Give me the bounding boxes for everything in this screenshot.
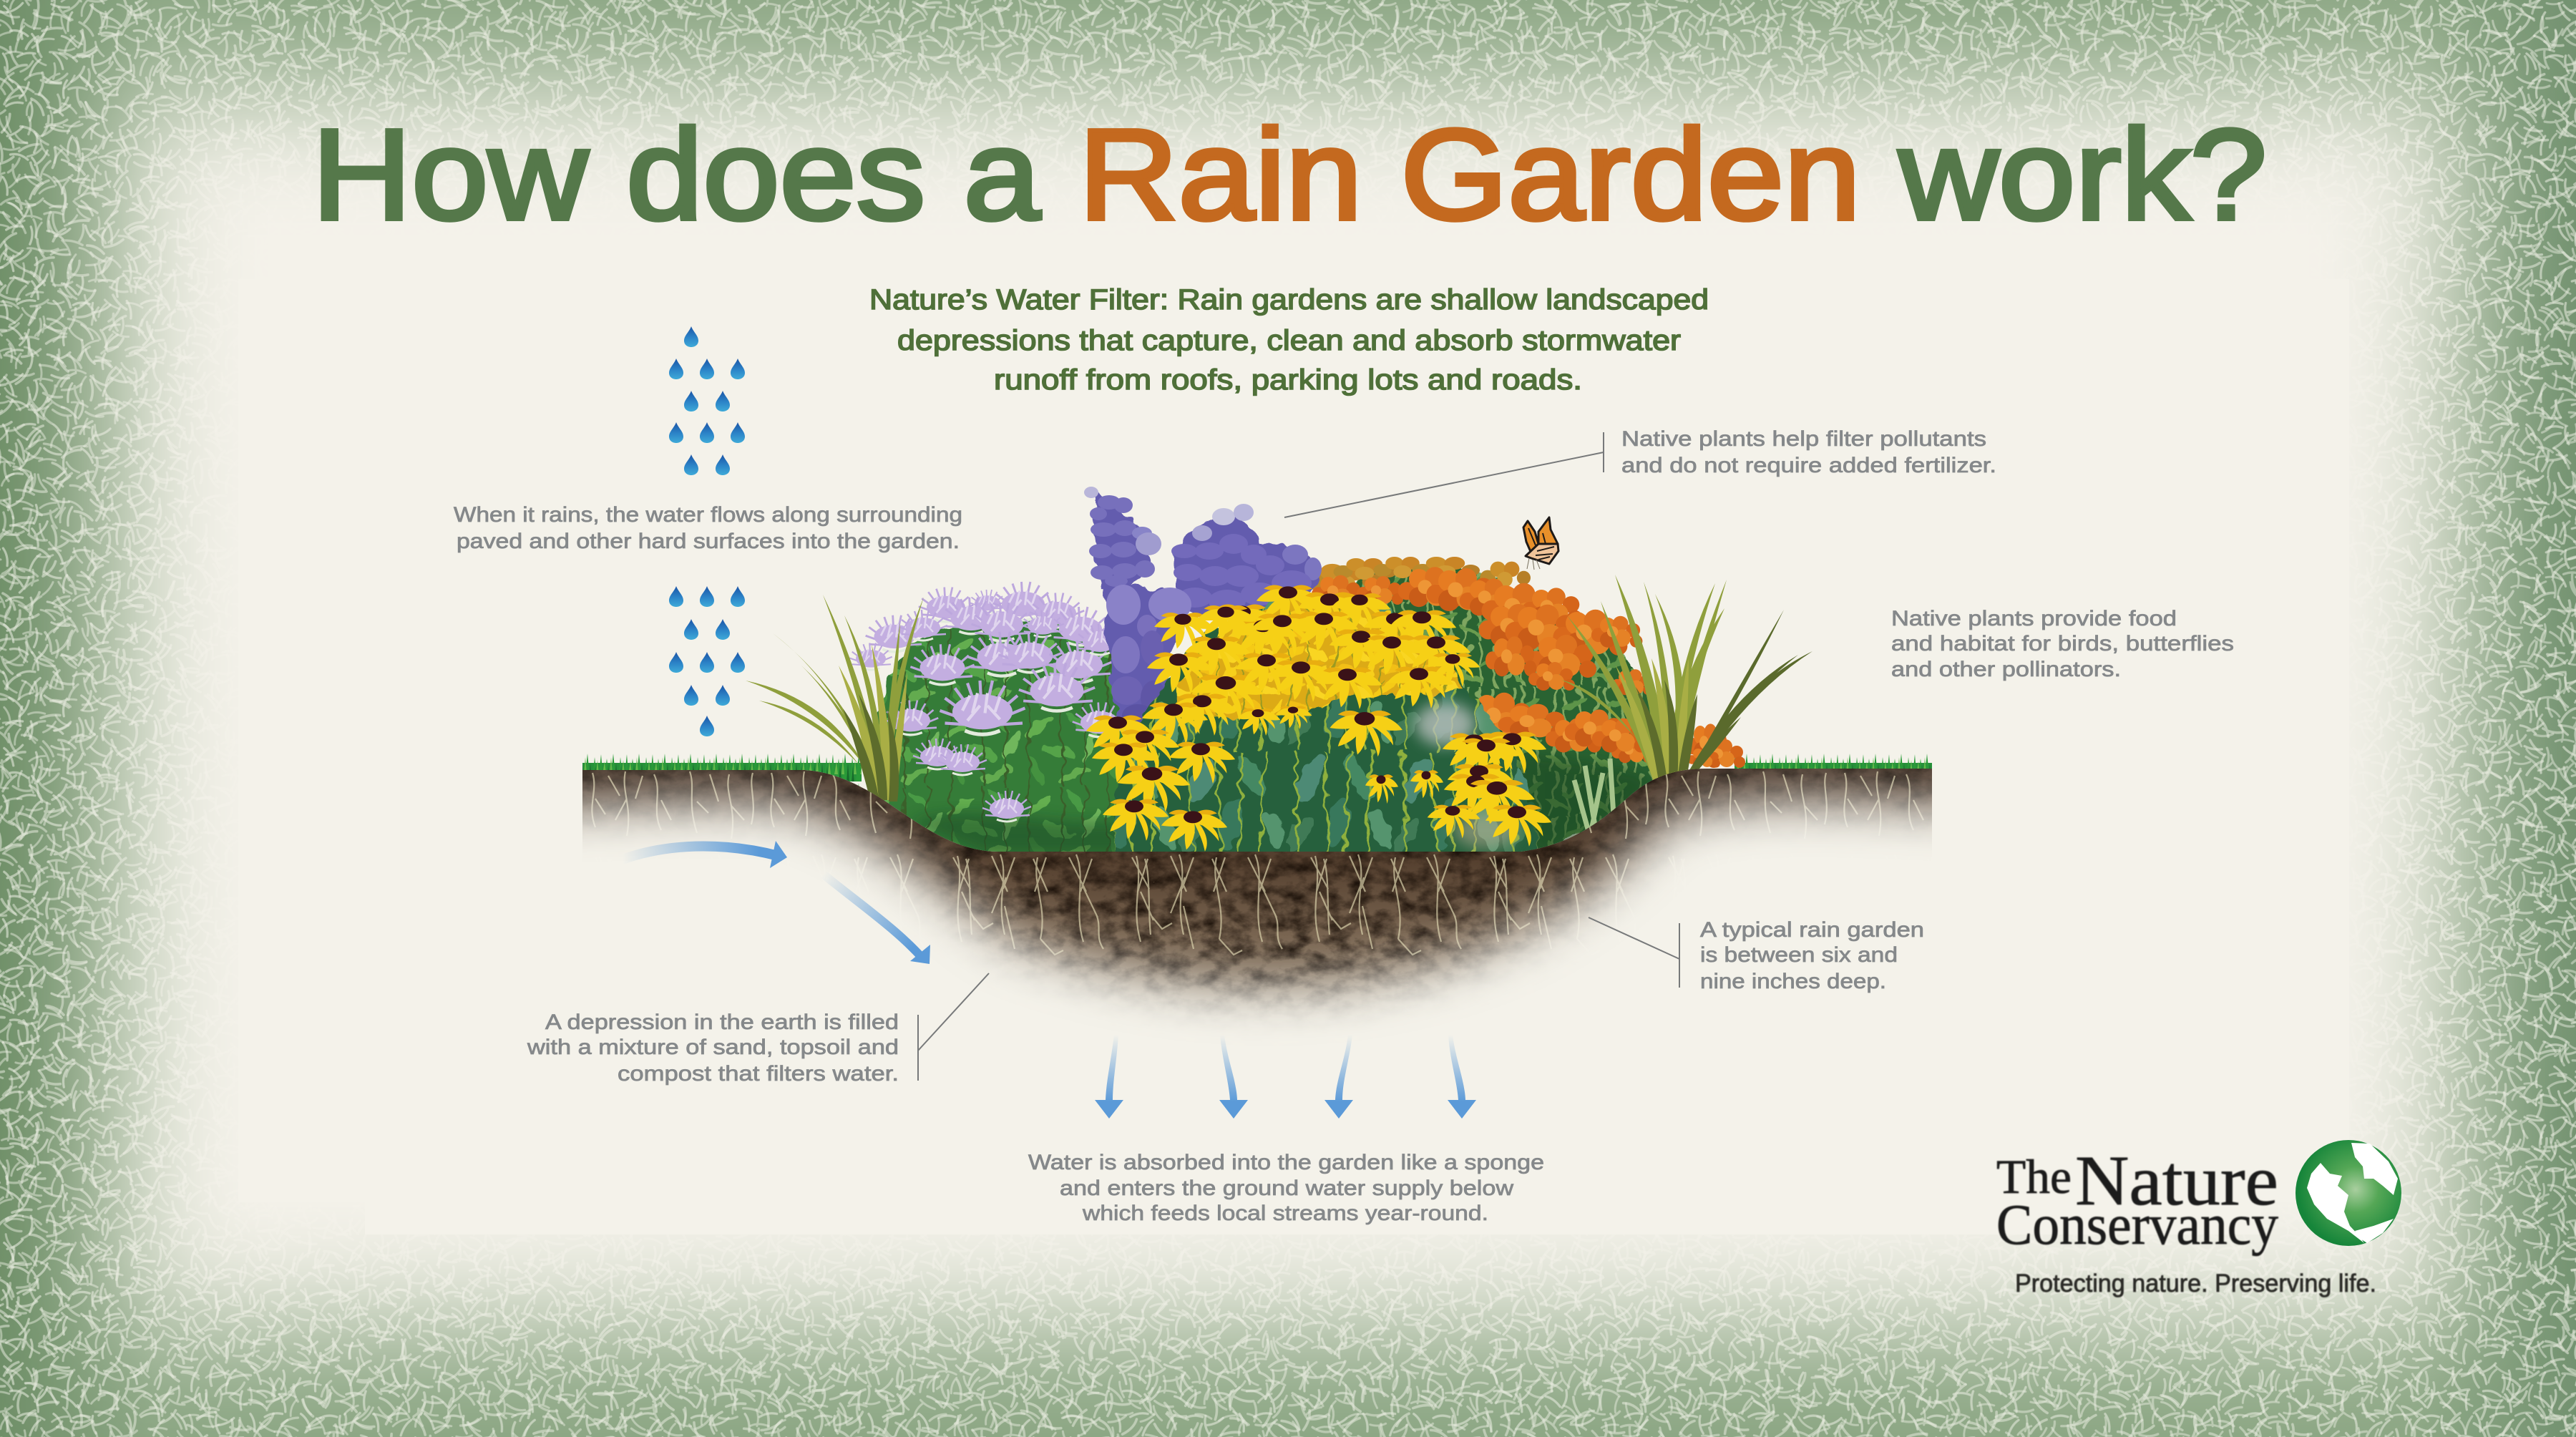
text: garden depth: A typical rain garden: [1700, 918, 1924, 942]
logo wordmark: Conservancy: [1996, 1194, 2278, 1257]
logo wordmark: The: [1996, 1149, 2072, 1204]
icon: rain drops lower group: [669, 586, 745, 736]
plant: orange butterfly weed: [1304, 557, 1745, 859]
plant: purple lupine: [1084, 487, 1322, 730]
text: native plants filter: and do not require added fertilizer.: [1621, 454, 1996, 477]
soil cross-section: [582, 769, 1932, 1028]
text: when it rains: When it rains, the water flows along surrounding: [454, 503, 962, 527]
text: water absorbed: and enters the ground water supply below: [1060, 1177, 1513, 1200]
text: native plants filter: Native plants help filter pollutants: [1621, 427, 1986, 451]
title: How does a Rain Garden work?: [312, 103, 2267, 247]
arrow: surface runoff flow: [618, 841, 787, 868]
logo: The Nature Conservancy: [1996, 1140, 2401, 1297]
text: native plants habitat: and habitat for birds, butterflies: [1891, 632, 2234, 656]
logo globe: [2296, 1140, 2401, 1246]
text: native plants habitat: [1891, 607, 2234, 681]
text: garden depth: is between six and: [1700, 943, 1898, 967]
arrows: water absorbing downward: [1095, 1035, 1476, 1119]
plant: right ornamental grass: [1561, 575, 1813, 781]
logo wordmark: Protecting nature. Preserving life.: [2015, 1270, 2376, 1297]
logo wordmark: [1996, 1141, 2376, 1297]
text: water absorbed: [1028, 1151, 1544, 1225]
icon: rain drops upper group: [669, 326, 745, 475]
text: soil mixture: A depression in the earth is filled: [545, 1010, 899, 1034]
garden plants: [746, 487, 1813, 866]
text: when it rains: [454, 503, 962, 553]
text: native plants filter: [1621, 427, 1996, 477]
intro text: depressions that capture, clean and absorb stormwater: [897, 325, 1681, 356]
logo wordmark: Nature: [2075, 1141, 2278, 1220]
icon: monarch butterfly: [1523, 517, 1558, 570]
intro text: runoff from roofs, parking lots and roads.: [994, 364, 1582, 396]
text: soil mixture: with a mixture of sand, topsoil and: [527, 1036, 899, 1059]
plant: left ornamental grass: [746, 595, 924, 802]
text: soil mixture: compost that filters water.: [618, 1062, 899, 1086]
plant: black-eyed Susans: [1086, 585, 1551, 859]
arrow: flow into garden: [824, 875, 930, 964]
text: native plants habitat: and other pollinators.: [1891, 658, 2121, 681]
intro text: [869, 284, 1709, 396]
plant: bee balm: [849, 582, 1174, 866]
text: garden depth: [1700, 918, 1924, 993]
leader line: native plants filter: [1284, 432, 1604, 517]
text: water absorbed: which feeds local streams year-round.: [1082, 1202, 1488, 1225]
leader line: depth: [1589, 917, 1679, 988]
text: when it rains: paved and other hard surfaces into the garden.: [457, 530, 960, 553]
intro text: Nature’s Water Filter: Rain gardens are shallow landscaped: [869, 284, 1709, 316]
text: native plants habitat: Native plants provide food: [1891, 607, 2177, 630]
text: soil mixture: [527, 1010, 899, 1086]
text: water absorbed: Water is absorbed into the garden like a sponge: [1028, 1151, 1544, 1174]
leader line: soil mixture: [918, 973, 989, 1081]
lawn grass strips: [582, 753, 1932, 789]
text: garden depth: nine inches deep.: [1700, 970, 1886, 993]
